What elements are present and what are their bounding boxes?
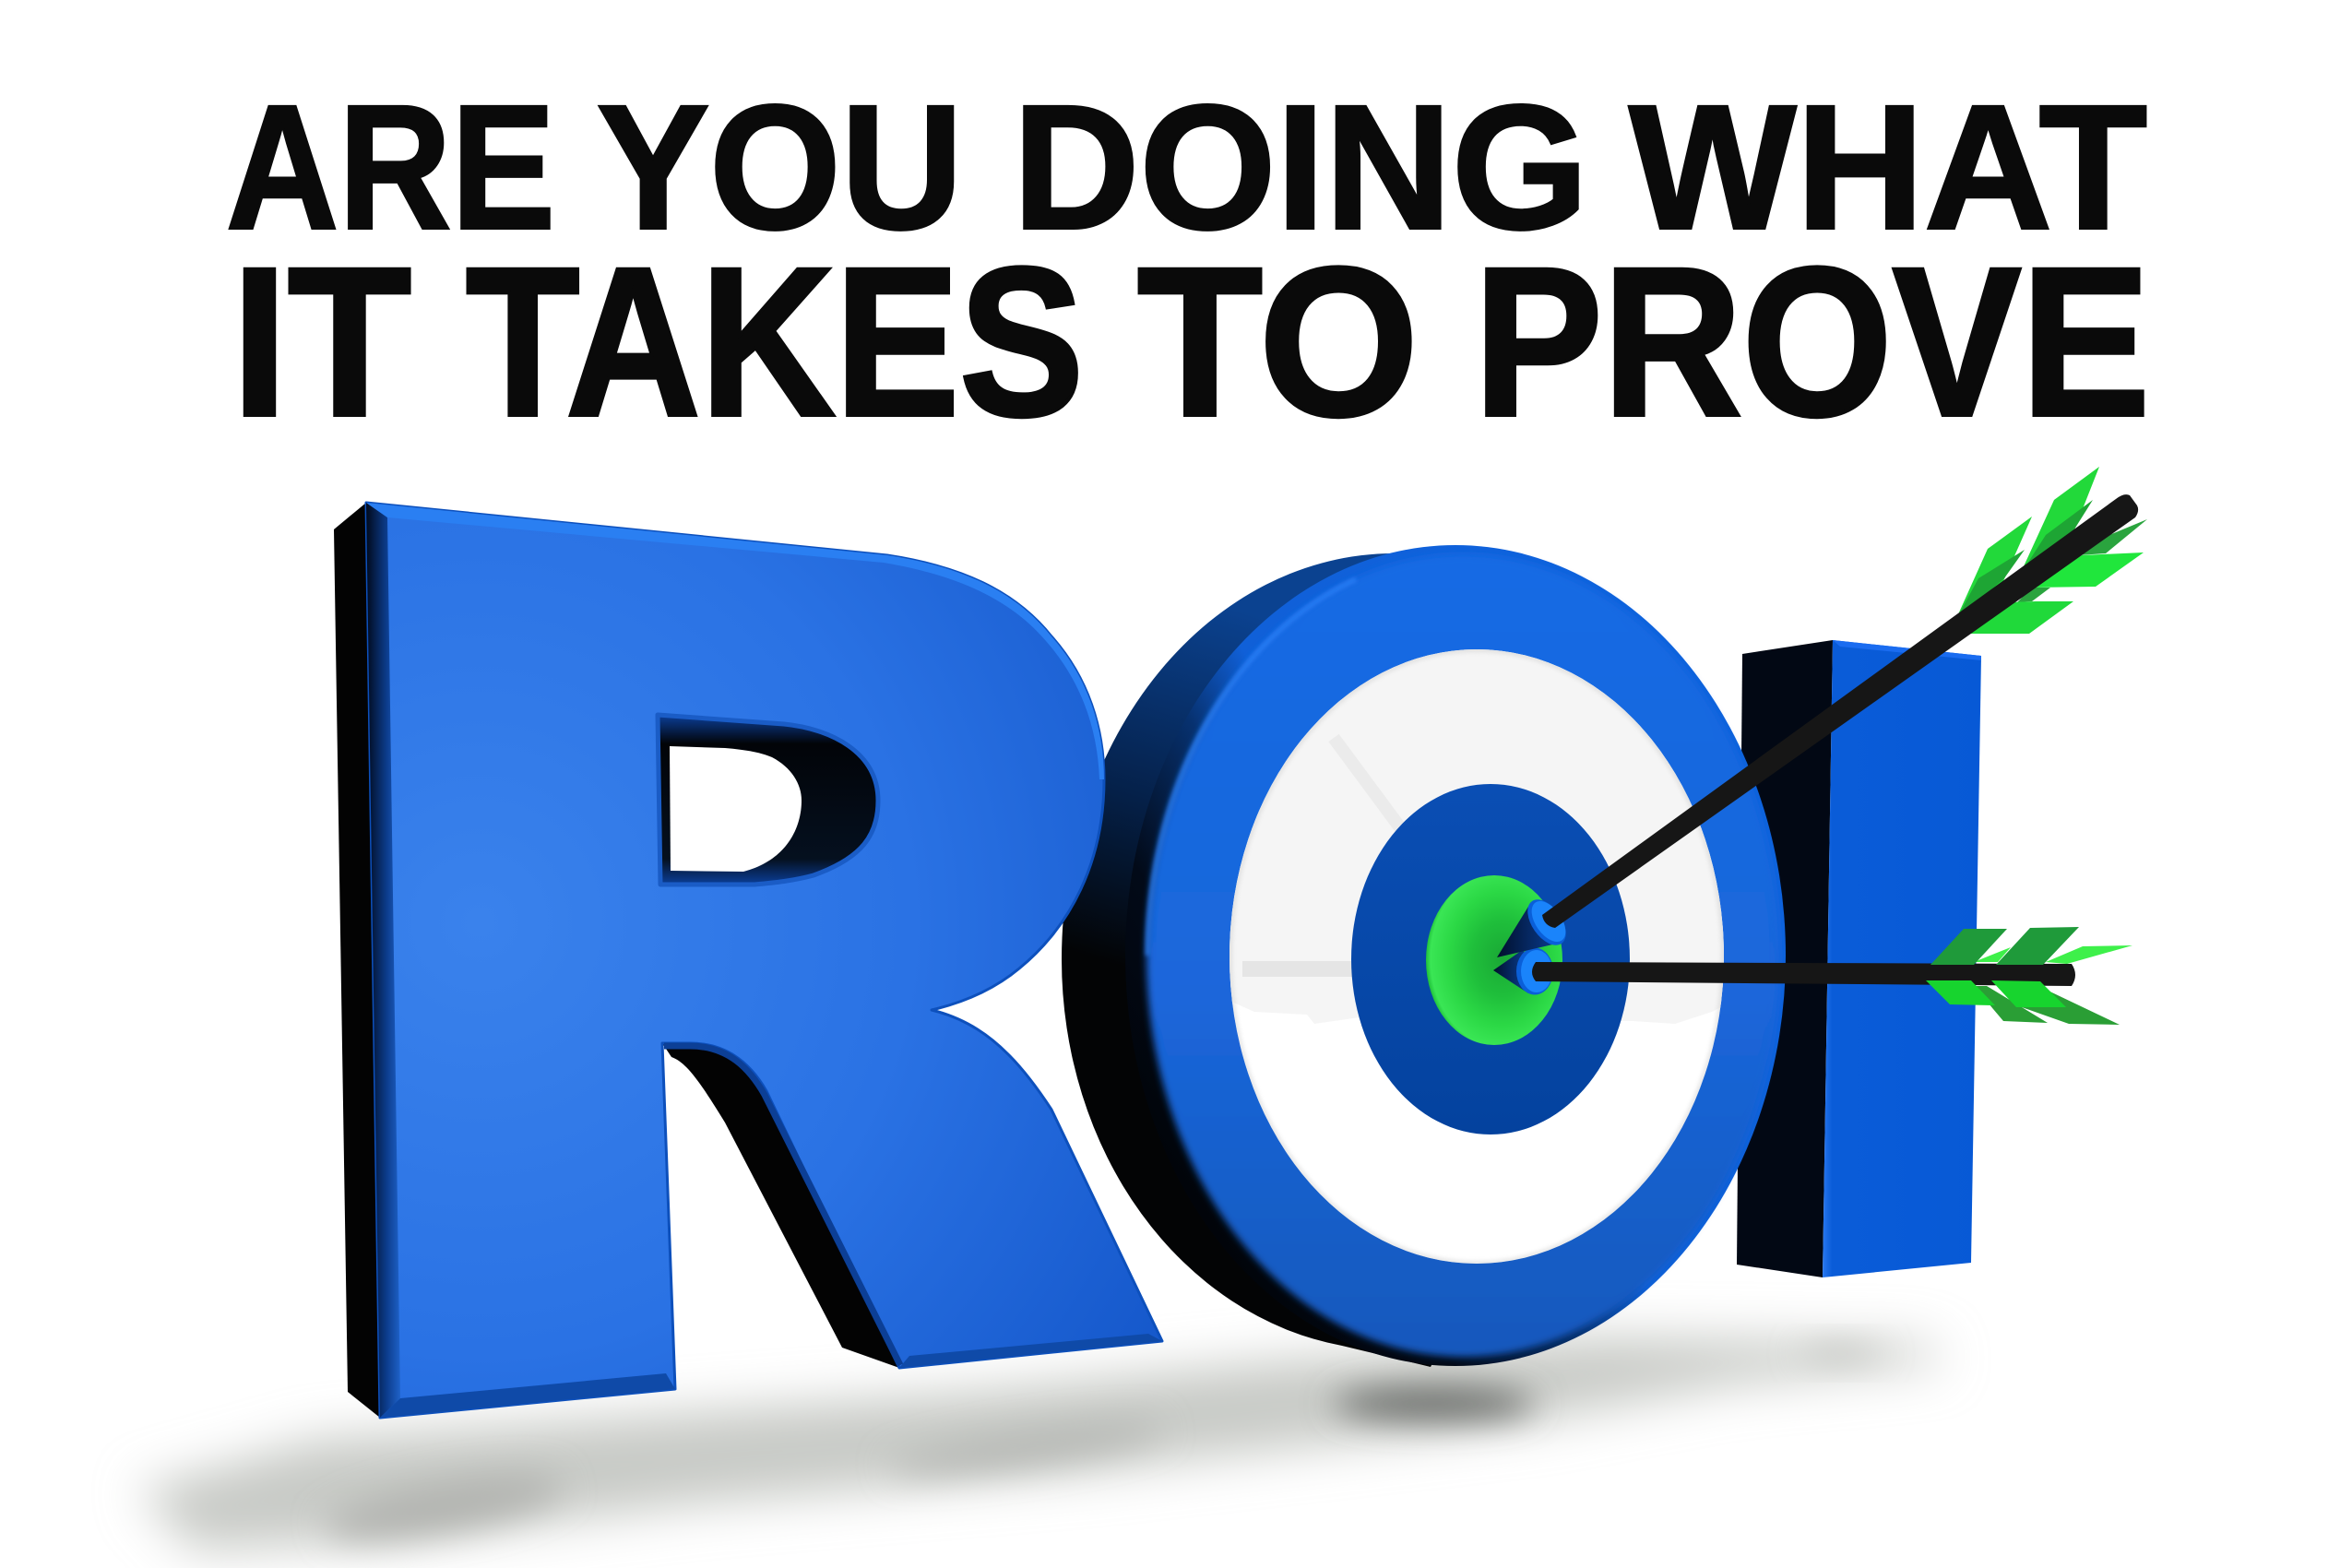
left bevel xyxy=(366,503,400,1418)
shaft xyxy=(1542,494,2138,928)
green bullseye xyxy=(1426,875,1562,1045)
bottom bevel xyxy=(380,1373,675,1418)
fletching in front xyxy=(1926,927,2079,1007)
reflection bands xyxy=(1242,961,1362,977)
arrow: angled xyxy=(1497,467,2147,957)
title xyxy=(226,68,2150,460)
inner blue ring xyxy=(1351,784,1630,1134)
title: TAKES xyxy=(466,223,1084,460)
title: WHAT xyxy=(1629,68,2147,266)
white ring xyxy=(1229,649,1725,1265)
front face xyxy=(366,503,1162,1418)
letter I xyxy=(1737,640,1981,1277)
ground shadow xyxy=(138,1337,1946,1550)
left side face xyxy=(334,503,380,1418)
fletching behind shaft xyxy=(1954,467,2147,634)
arrow head xyxy=(1493,949,1528,993)
arrow: straight xyxy=(1493,927,2132,1025)
counter dark interior xyxy=(658,715,878,885)
leg side face xyxy=(662,1033,922,1368)
shaft xyxy=(1532,962,2075,986)
target front bevel xyxy=(1125,545,1786,1366)
leg edge bevel xyxy=(664,1046,900,1365)
infographic canvas xyxy=(135,103,2147,1568)
title: DOING xyxy=(1013,68,1588,266)
target back side xyxy=(1062,546,1660,1367)
counter see-through hole xyxy=(670,746,802,872)
fletching behind shaft xyxy=(1974,945,2132,1025)
title: TO xyxy=(1137,223,1419,460)
outer blue ring xyxy=(1146,554,1779,1357)
title: ARE xyxy=(226,68,555,266)
top bevel xyxy=(366,503,1104,779)
letter O target xyxy=(1062,545,1786,1367)
title: PROVE xyxy=(1474,223,2150,460)
letter R xyxy=(334,503,1162,1418)
arrow head xyxy=(1497,902,1561,957)
title: IT xyxy=(232,223,411,460)
title: YOU xyxy=(597,68,963,266)
rim highlight xyxy=(1147,579,1356,956)
